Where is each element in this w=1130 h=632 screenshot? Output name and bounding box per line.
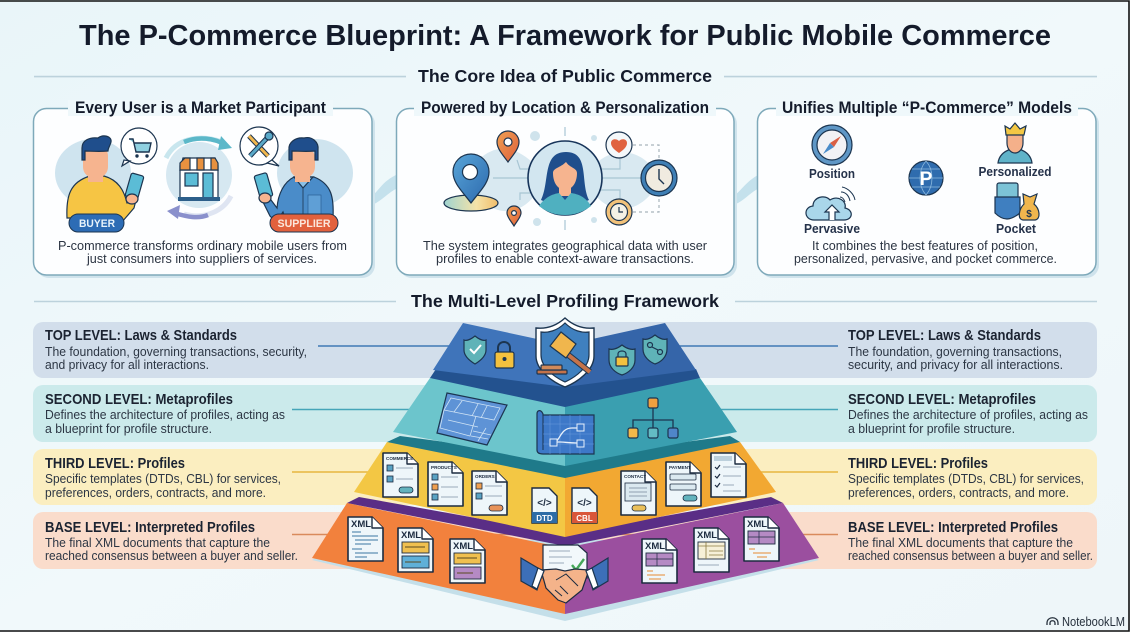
text: top level right [848, 328, 1063, 372]
panel: powered by location and personalization [396, 99, 737, 278]
icon: gavel shield [536, 318, 594, 387]
tier: third level [354, 442, 776, 537]
document: xml 1 [348, 517, 383, 561]
band: top level [33, 322, 1097, 378]
connector: panel 1 to panel 2 [370, 174, 398, 206]
panel text: personalized, pervasive, and pocket commerce. [794, 251, 1057, 266]
text: third level right [848, 456, 1084, 500]
panel text: P-commerce transforms ordinary mobile users from [58, 238, 347, 253]
panel: every user is a market participant [34, 99, 375, 278]
panel text: The system integrates geographical data with user [423, 238, 708, 253]
panel text [794, 238, 1057, 266]
icon: user portrait [528, 141, 602, 215]
icon: check shield [464, 336, 486, 364]
icon: p globe: P [920, 169, 933, 190]
document: checklist [711, 453, 746, 497]
text: top level right: security, and privacy for all interactions. [848, 357, 1063, 372]
tier: base level [312, 497, 819, 621]
text: top level left: TOP LEVEL: Laws & Standards [45, 328, 237, 344]
text: top level right: The foundation, governing transactions, [848, 344, 1062, 359]
document: products: PRODUCTS [431, 465, 457, 470]
text: second level left: a blueprint for profile structure. [45, 421, 212, 436]
text: base level right: reached consensus between a buyer and seller. [848, 548, 1093, 563]
text: base level left: BASE LEVEL: Interpreted Profiles [45, 520, 255, 536]
document: xml 6 [744, 517, 779, 561]
icon: p globe [909, 161, 943, 195]
icon: pocket and money bag: $ [1026, 209, 1032, 220]
document: cbl: CBL [576, 514, 593, 523]
text: top level left [45, 328, 307, 372]
text: second level right: Defines the architecture of profiles, acting as [848, 407, 1088, 422]
text: third level right: Specific templates (DTDs, CBL) for services, [848, 471, 1084, 486]
document: orders: ORDERS [475, 474, 495, 479]
title: The P-Commerce Blueprint: A Framework for Public Mobile Commerce [79, 20, 1051, 52]
document: xml 2 [398, 528, 433, 572]
label: pervasive: Pervasive [804, 222, 860, 236]
document: commerce: COMMERCE [386, 456, 413, 461]
panel text [58, 238, 347, 266]
document: xml 5: XML [697, 530, 717, 541]
label: personalized: Personalized [978, 165, 1052, 179]
tier: top level [433, 323, 696, 387]
document: contact: CONTACT [624, 474, 646, 479]
document: xml 4 [642, 539, 677, 583]
panel: unifies multiple p-commerce models [758, 99, 1099, 278]
figure: buyer [55, 136, 144, 222]
label: position: Position [809, 167, 855, 181]
document: orders [472, 471, 507, 515]
panel text: just consumers into suppliers of services. [86, 251, 317, 266]
document: dtd: </> [537, 498, 552, 509]
text: second level left: Defines the architecture of profiles, acting as [45, 407, 285, 422]
tier: second level [393, 378, 737, 466]
connector: panel 2 to panel 3 [732, 174, 760, 206]
icon: heart [606, 132, 632, 158]
text: third level left: THIRD LEVEL: Profiles [45, 456, 185, 472]
band: second level [33, 385, 1097, 442]
text: top level left: and privacy for all interactions. [45, 357, 209, 372]
text: base level left [45, 520, 298, 563]
text: base level right: BASE LEVEL: Interpreted Profiles [848, 520, 1058, 536]
icon: tools speech bubble [240, 127, 279, 166]
tier: second level band [387, 436, 740, 478]
icon: large clock [641, 160, 677, 196]
icon: blueprint scroll [537, 411, 594, 454]
document: cbl: </> [577, 498, 592, 509]
icon: person with crown [998, 123, 1032, 163]
document: payment [666, 462, 701, 506]
text: base level left: The final XML documents that capture the [45, 535, 270, 550]
badge: supplier: SUPPLIER [278, 218, 331, 230]
icon: lock shield [609, 345, 635, 375]
icon: pocket and money bag [995, 183, 1039, 220]
text: third level left [45, 456, 281, 500]
panel heading: Unifies Multiple “P-Commerce” Models [782, 99, 1072, 117]
text: second level left [45, 392, 285, 436]
document: commerce [383, 453, 418, 497]
document: products [428, 462, 463, 506]
document: xml 5 [694, 528, 729, 572]
panel heading: Powered by Location & Personalization [421, 99, 709, 117]
document: xml 6: XML [747, 519, 767, 530]
document: xml 1: XML [351, 519, 371, 530]
text: top level right: TOP LEVEL: Laws & Standards [848, 328, 1041, 344]
icon: orange pin [497, 131, 519, 162]
icon: small clock [606, 199, 632, 225]
text: second level right: a blueprint for profile structure. [848, 421, 1015, 436]
text: third level left: Specific templates (DTDs, CBL) for services, [45, 471, 281, 486]
document: cbl [572, 488, 597, 523]
icon: blueprint sheet [437, 393, 507, 445]
text: second level left: SECOND LEVEL: Metaprofiles [45, 392, 233, 408]
document: xml 2: XML [401, 530, 421, 541]
panel heading: Every User is a Market Participant [75, 99, 326, 117]
document: xml 3: XML [453, 541, 473, 552]
section heading: core idea: The Core Idea of Public Commerce [418, 66, 712, 86]
icon: cart speech bubble [121, 128, 157, 166]
band: base level [33, 512, 1097, 569]
text: third level left: preferences, orders, contracts, and more. [45, 485, 266, 500]
section heading: profiling framework: The Multi-Level Profiling Framework [411, 291, 719, 311]
icon: compass [812, 125, 852, 165]
panel text: It combines the best features of position, [812, 238, 1038, 253]
figure: supplier [254, 138, 353, 222]
band: third level [33, 449, 1097, 505]
icon: org chart [628, 398, 678, 438]
pyramid [312, 318, 819, 621]
icon: padlock [495, 342, 514, 368]
tier: top level band [430, 369, 700, 407]
document: contact [621, 471, 656, 515]
badge: supplier [270, 214, 338, 232]
document: dtd: DTD [536, 514, 553, 523]
icon: large map pin [444, 154, 498, 211]
text: second level right [848, 392, 1088, 436]
document: dtd [532, 488, 557, 523]
document: xml 4: XML [645, 541, 665, 552]
panel text: profiles to enable context-aware transactions. [436, 251, 694, 266]
text: base level right: The final XML documents that capture the [848, 535, 1073, 550]
text: third level right: THIRD LEVEL: Profiles [848, 456, 988, 472]
text: base level right [848, 520, 1093, 563]
panel text [423, 238, 708, 266]
text: second level right: SECOND LEVEL: Metaprofiles [848, 392, 1036, 408]
text: base level left: reached consensus between a buyer and seller. [45, 548, 298, 563]
text: third level right: preferences, orders, contracts, and more. [848, 485, 1069, 500]
icon: agreement handshake [521, 545, 608, 603]
document: payment: PAYMENT [669, 465, 691, 470]
text: top level left: The foundation, governing transactions, security, [45, 344, 307, 359]
icon: cloud [806, 187, 855, 220]
badge: buyer [69, 214, 124, 232]
icon: storefront with cycle arrows [166, 136, 232, 219]
icon: key shield [643, 335, 667, 364]
badge: buyer: BUYER [79, 218, 115, 230]
network background [478, 127, 659, 230]
label: pocket: Pocket [996, 222, 1037, 236]
document: xml 3 [450, 539, 485, 583]
icon: small pin [507, 206, 521, 226]
